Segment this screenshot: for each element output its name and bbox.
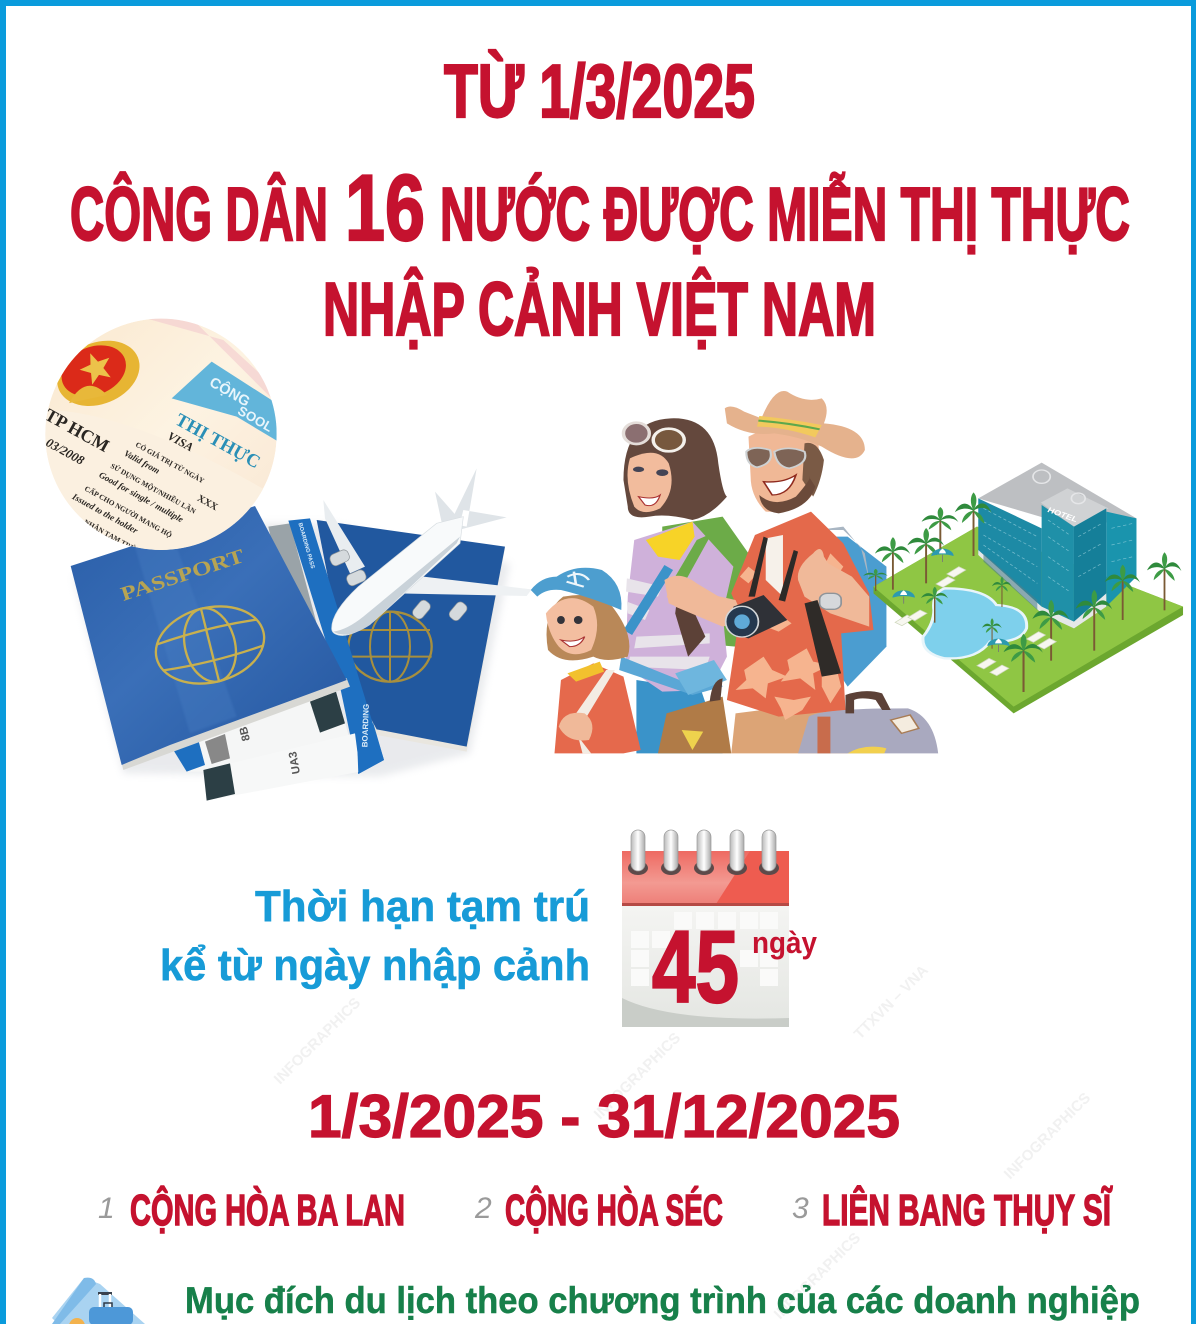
- purpose text: Mục đích du lịch theo chương trình của các doanh nghiệp: [185, 1280, 1140, 1321]
- title line 1: TỪ 1/3/2025: [444, 49, 755, 133]
- father: [667, 391, 886, 753]
- visa text: NHẬN TẠM TRÚ: [82, 516, 138, 553]
- visa text: [46, 408, 260, 547]
- visa text: CÓ GIÁ TRỊ TỪ NGÀY: [134, 439, 207, 486]
- country 2: [474, 1184, 723, 1235]
- illustration: passports, plane and visa: [41, 317, 532, 801]
- visa text: 03/2008: [44, 435, 87, 468]
- country list: [98, 1184, 1113, 1235]
- title line 2: 16: [345, 155, 425, 260]
- pool: [923, 588, 1027, 658]
- visa text: TP HCM: [41, 404, 113, 456]
- hotel building: [978, 463, 1136, 628]
- stay duration text: kể từ ngày nhập cảnh: [160, 941, 590, 990]
- boarding passes: BOARDING: [360, 704, 371, 747]
- front passport: PASSPORT: [118, 545, 248, 606]
- 45: 45: [652, 910, 739, 1024]
- soft shadow: [73, 523, 510, 777]
- visa text: Issued to the holder: [70, 491, 140, 536]
- title line 3: NHẬP CẢNH VIỆT NAM: [323, 267, 876, 351]
- visa text: CẤP CHO NGƯỜI MANG HỘ: [83, 483, 174, 540]
- back passport: [317, 520, 505, 752]
- visa text: THỊ THỰC: [172, 409, 264, 473]
- visa text: SỬ DỤNG MỘT/NHIỀU LẦN: [109, 460, 198, 516]
- country 1: CỘNG HÒA BA LAN: [130, 1184, 405, 1235]
- watermarks: INFOGRAPHICS: [771, 1229, 864, 1323]
- watermarks: INFOGRAPHICS: [271, 994, 364, 1088]
- calendar page: [622, 906, 789, 1027]
- title line 2: CÔNG DÂN: [70, 172, 328, 256]
- title: [70, 49, 1130, 351]
- hotel building: HOTEL: [1046, 505, 1080, 524]
- calendar header: [622, 851, 789, 904]
- watermarks: TTXVN – VNA: [851, 962, 932, 1043]
- stay duration text: Thời hạn tạm trú: [255, 882, 590, 931]
- airplane: [323, 468, 532, 636]
- watermarks: INFOGRAPHICS: [591, 1029, 684, 1123]
- title line 2: [70, 155, 1130, 260]
- illustration: hotel resort: [863, 463, 1183, 713]
- country 1: [98, 1184, 405, 1235]
- binder rings: [628, 830, 779, 875]
- visa text: XXX: [195, 493, 220, 513]
- grey suitcase: [798, 691, 938, 753]
- stay duration text: [160, 882, 590, 990]
- visa circle: [41, 317, 277, 553]
- mother: [619, 418, 748, 753]
- visa stamp: [172, 362, 277, 441]
- visa circle: SOOL: [235, 403, 275, 435]
- national emblem: [57, 340, 140, 406]
- boarding passes: 8B: [238, 725, 253, 742]
- boarding passes: UA3: [287, 750, 303, 775]
- watermarks: [271, 962, 1094, 1323]
- illustration: tourist family: [531, 391, 938, 753]
- boarding passes: BOARDING PASS: [296, 522, 315, 570]
- visa text: Valid from: [122, 448, 161, 476]
- ngày: ngày: [752, 925, 818, 960]
- boarding passes: [173, 518, 384, 801]
- icon: map and suitcase: [52, 1278, 145, 1324]
- brown suitcase: [658, 678, 731, 753]
- visa text: VISA: [165, 429, 196, 454]
- country 1: 1: [98, 1192, 115, 1225]
- visa circle: CỘNG: [206, 373, 253, 410]
- date range: 1/3/2025 - 31/12/2025: [308, 1083, 900, 1150]
- country 2: CỘNG HÒA SÉC: [505, 1184, 723, 1235]
- visa text: Good for single / multiple: [97, 470, 185, 524]
- calendar: 45 days: [622, 830, 818, 1027]
- lawn: [874, 527, 1183, 713]
- child: [531, 568, 641, 753]
- watermarks: INFOGRAPHICS: [1001, 1089, 1094, 1183]
- country 2: 2: [474, 1192, 492, 1225]
- front passport: [71, 506, 350, 770]
- country 3: 3: [792, 1192, 809, 1225]
- palm trees and umbrellas: [863, 492, 1181, 692]
